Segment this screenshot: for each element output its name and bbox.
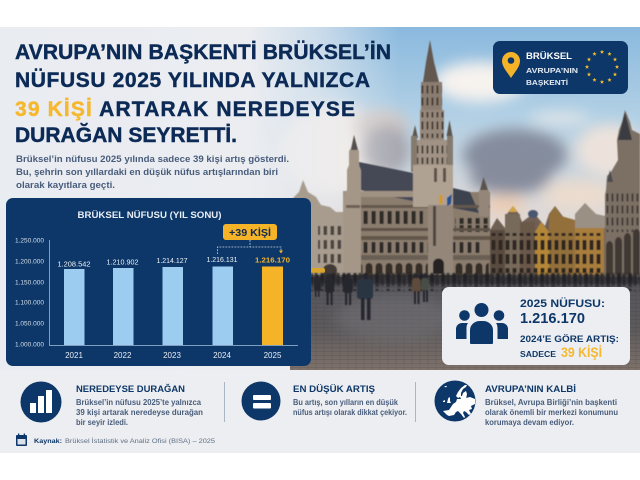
feature: lowest increase: nüfus artışı olarak dikkat çekiyor.	[293, 408, 407, 417]
source line: Kaynak:	[34, 438, 62, 445]
feature: heart of Europe	[434, 380, 618, 427]
title: NÜFUSU 2025 YILINDA YALNIZCA	[15, 69, 370, 92]
card text: 39 KİŞİ	[561, 344, 602, 360]
feature: lowest increase: Bu artış, son yılların en düşük	[293, 398, 399, 407]
card text: 1.216.170	[520, 310, 585, 327]
feature: heart of Europe: AVRUPA’NIN KALBİ	[485, 384, 576, 395]
icon: equals sign	[242, 382, 280, 420]
flags	[439, 194, 452, 206]
population card	[442, 287, 630, 365]
bar value labels: 1.216.131	[206, 255, 238, 264]
feature: nearly stagnant: Brüksel’in nüfusu 2025’te yalnızca	[76, 398, 202, 407]
card text: 2025 NÜFUSU:	[520, 297, 605, 310]
year labels: 2023	[163, 351, 181, 360]
feature: nearly stagnant	[20, 382, 203, 427]
year labels	[65, 351, 282, 360]
chart panel	[6, 198, 311, 366]
feature: lowest increase	[242, 382, 407, 420]
title	[15, 41, 391, 147]
photo: sky with clouds	[0, 27, 640, 282]
y axis labels: 1.250.000	[15, 238, 44, 244]
Scandinavia	[456, 385, 467, 399]
year labels: 2025	[264, 351, 282, 360]
badge text: BRÜKSEL	[526, 51, 573, 61]
increase badge	[223, 224, 277, 240]
source line	[16, 434, 215, 446]
left fade behind text	[0, 27, 400, 372]
year labels: 2022	[114, 351, 132, 360]
title: AVRUPA’NIN BAŞKENTİ BRÜKSEL’İN	[15, 41, 391, 64]
icon: EU stars	[585, 50, 619, 84]
feature: heart of Europe: olarak önemli bir merkezi konumunu	[485, 408, 618, 417]
badge text: BAŞKENTİ	[526, 78, 568, 87]
mainland	[443, 397, 475, 418]
intro text: olarak kayıtlara geçti.	[16, 180, 115, 191]
chart title: BRÜKSEL NÜFUSU (YIL SONU)	[78, 210, 222, 221]
right guild houses	[490, 203, 605, 277]
main belfry tower	[411, 40, 453, 275]
photo: square with crowd	[290, 268, 640, 372]
y axis labels: 1.050.000	[15, 320, 44, 328]
icon: calendar	[16, 434, 27, 446]
left guild house	[293, 180, 343, 277]
town hall main body	[343, 135, 490, 278]
feature: nearly stagnant: NEREDEYSE DURAĞAN	[76, 383, 185, 395]
bars	[64, 266, 283, 345]
title: 39 KİŞİ ARTARAK NEREDEYSE	[15, 98, 355, 121]
y axis labels: 1.000.000	[15, 342, 44, 348]
bar value labels: 1.208.542	[58, 260, 90, 268]
badge text	[526, 51, 578, 87]
left corner turret	[343, 135, 361, 275]
right corner building	[605, 110, 640, 277]
dashed change arrow	[218, 240, 283, 254]
right turret	[479, 177, 489, 216]
card text: SADECE	[520, 349, 556, 359]
British Isles and islands	[443, 386, 451, 403]
town hall roof	[359, 162, 422, 203]
bottom info strip	[0, 370, 640, 453]
intro text: Brüksel’in nüfusu 2025 yılında sadece 39 kişi artış gösterdi.	[16, 154, 289, 165]
feature: lowest increase: EN DÜŞÜK ARTIŞ	[293, 384, 375, 395]
icon: map pin	[502, 52, 520, 78]
intro text	[16, 154, 289, 191]
bar value labels	[58, 255, 290, 268]
feature: heart of Europe: korumaya devam ediyor.	[485, 418, 574, 427]
photo: buildings of Grand-Place	[293, 40, 640, 278]
card text: 2024’E GÖRE ARTIŞ:	[520, 334, 619, 345]
intro text: Bu, şehrin son yıllardaki en düşük nüfus artışlarından biri	[16, 167, 278, 178]
y axis labels	[15, 238, 44, 348]
source line: Brüksel İstatistik ve Analiz Ofisi (BISA) – 2025	[65, 436, 215, 445]
card text	[520, 297, 619, 360]
chart axes	[50, 240, 298, 346]
location badge	[493, 41, 628, 94]
increase badge: +39 KİŞİ	[229, 226, 271, 239]
yellow umbrellas	[311, 268, 325, 273]
feature: nearly stagnant: 39 kişi artarak neredeyse durağan	[76, 408, 203, 417]
feature: nearly stagnant: bir seyir izledi.	[76, 418, 128, 427]
badge text: AVRUPA’NIN	[526, 66, 578, 75]
y axis labels: 1.150.000	[15, 280, 44, 286]
feature: heart of Europe: Brüksel, Avrupa Birliği’nin başkenti	[485, 398, 617, 407]
bar value labels: 1.210.902	[106, 258, 138, 266]
icon: bar chart	[20, 382, 62, 422]
icon: Europe map	[434, 380, 476, 422]
y axis labels: 1.200.000	[15, 258, 44, 266]
year labels: 2024	[213, 351, 231, 360]
icon: people	[456, 303, 508, 344]
year labels: 2021	[65, 351, 83, 360]
y axis labels: 1.100.000	[15, 300, 44, 306]
bar value labels: 1.216.170	[255, 256, 290, 264]
bar value labels: 1.214.127	[156, 256, 188, 265]
title: DURAĞAN SEYRETTİ.	[15, 123, 237, 147]
